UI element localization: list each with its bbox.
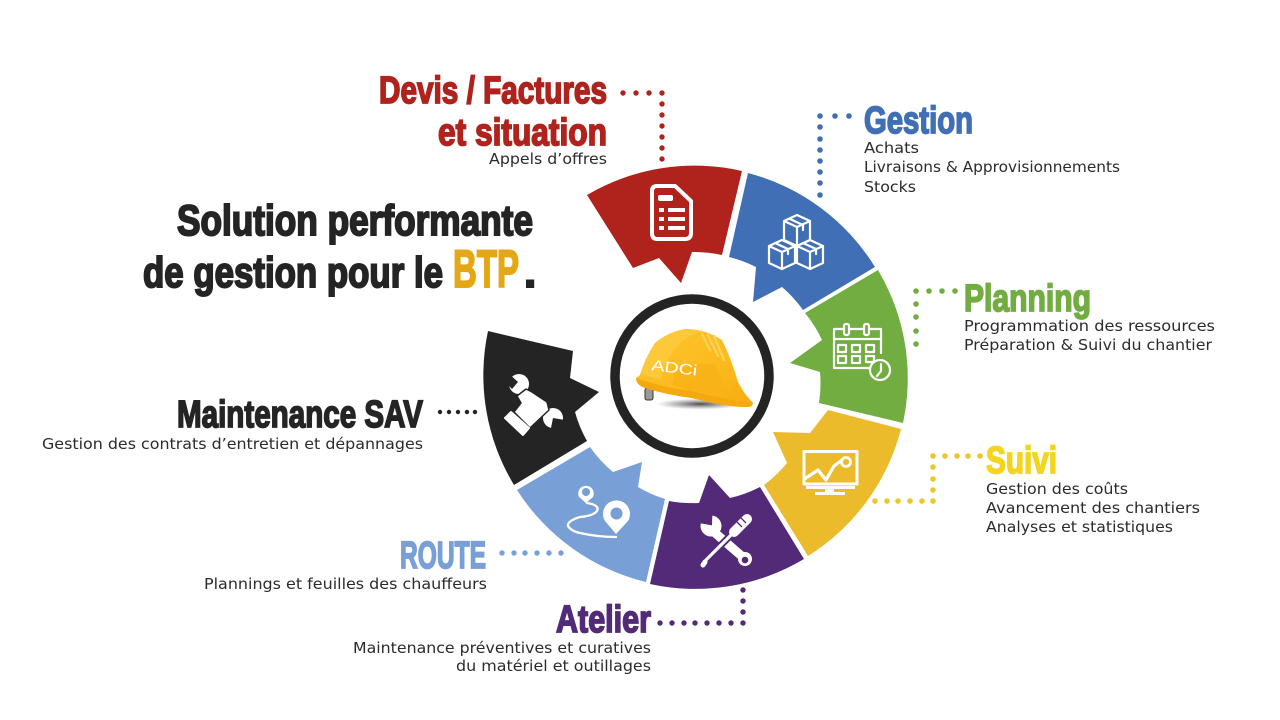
icon: tools bbox=[698, 511, 752, 566]
callout: maintenance: Gestion des contrats d’entretien et dépannages bbox=[42, 435, 423, 453]
callout: suivi: Analyses et statistiques bbox=[986, 518, 1173, 536]
dotted connector: gestion bbox=[817, 113, 852, 198]
callout: devis bbox=[379, 70, 607, 168]
segment: gestion (blue) bbox=[729, 173, 875, 310]
icon: boxes bbox=[769, 215, 823, 269]
callout: maintenance: Maintenance SAV bbox=[177, 394, 424, 436]
dotted connector: maintenance bbox=[438, 410, 477, 414]
callout: route: Plannings et feuilles des chauffeurs bbox=[204, 575, 487, 593]
callout: suivi bbox=[986, 440, 1200, 536]
callout: planning: Préparation & Suivi du chantier bbox=[964, 336, 1213, 354]
callout: gestion bbox=[864, 100, 1120, 196]
title: . bbox=[524, 248, 536, 297]
segment: maintenance (black) bbox=[483, 331, 599, 485]
dotted connector: route bbox=[499, 550, 564, 556]
callout: maintenance bbox=[42, 394, 424, 453]
callout: planning: Planning bbox=[964, 278, 1091, 320]
icon: route pins bbox=[568, 486, 630, 537]
central ring bbox=[615, 299, 769, 453]
callout: gestion: Stocks bbox=[864, 178, 916, 196]
title: BTP bbox=[453, 240, 519, 299]
callout: gestion: Gestion bbox=[864, 100, 973, 142]
icon: calendar bbox=[834, 324, 890, 380]
helmet text: ADCi bbox=[651, 357, 698, 380]
segment: atelier (purple) bbox=[650, 475, 804, 589]
segment: devis (red) bbox=[587, 166, 742, 283]
dotted connector: atelier bbox=[657, 587, 746, 626]
callout: route bbox=[204, 535, 487, 593]
callout: suivi: Suivi bbox=[986, 440, 1057, 482]
dotted connector: planning bbox=[913, 288, 958, 347]
callout: planning bbox=[964, 278, 1215, 354]
callout: planning: Programmation des ressources bbox=[964, 317, 1215, 335]
title bbox=[143, 197, 536, 299]
callout: suivi: Gestion des coûts bbox=[986, 480, 1128, 498]
callout: suivi: Avancement des chantiers bbox=[986, 499, 1200, 517]
segment: route (light blue) bbox=[517, 447, 665, 582]
callout: atelier: Atelier bbox=[556, 599, 651, 641]
icon: hand with wrench bbox=[502, 372, 565, 435]
helmet logo bbox=[636, 329, 753, 410]
callout: gestion: Achats bbox=[864, 139, 919, 157]
callout: atelier: Maintenance préventives et curatives bbox=[353, 639, 651, 657]
callout: devis: et situation bbox=[438, 112, 607, 154]
callout: devis: Appels d’offres bbox=[489, 150, 607, 168]
callout: atelier: du matériel et outillages bbox=[456, 657, 651, 675]
title: de gestion pour le bbox=[143, 249, 443, 297]
callout: gestion: Livraisons & Approvisionnements bbox=[864, 158, 1120, 176]
dotted connector: suivi bbox=[872, 453, 983, 504]
callout: devis: Devis / Factures bbox=[379, 70, 607, 112]
segment: planning (green) bbox=[790, 270, 908, 423]
callout: atelier bbox=[353, 599, 651, 675]
icon: monitor chart bbox=[804, 452, 857, 495]
segment: suivi (yellow) bbox=[764, 410, 901, 556]
callout: route: ROUTE bbox=[400, 535, 486, 577]
title: Solution performante bbox=[177, 197, 533, 245]
dotted connector: devis bbox=[620, 90, 665, 162]
icon: document bbox=[652, 186, 691, 239]
